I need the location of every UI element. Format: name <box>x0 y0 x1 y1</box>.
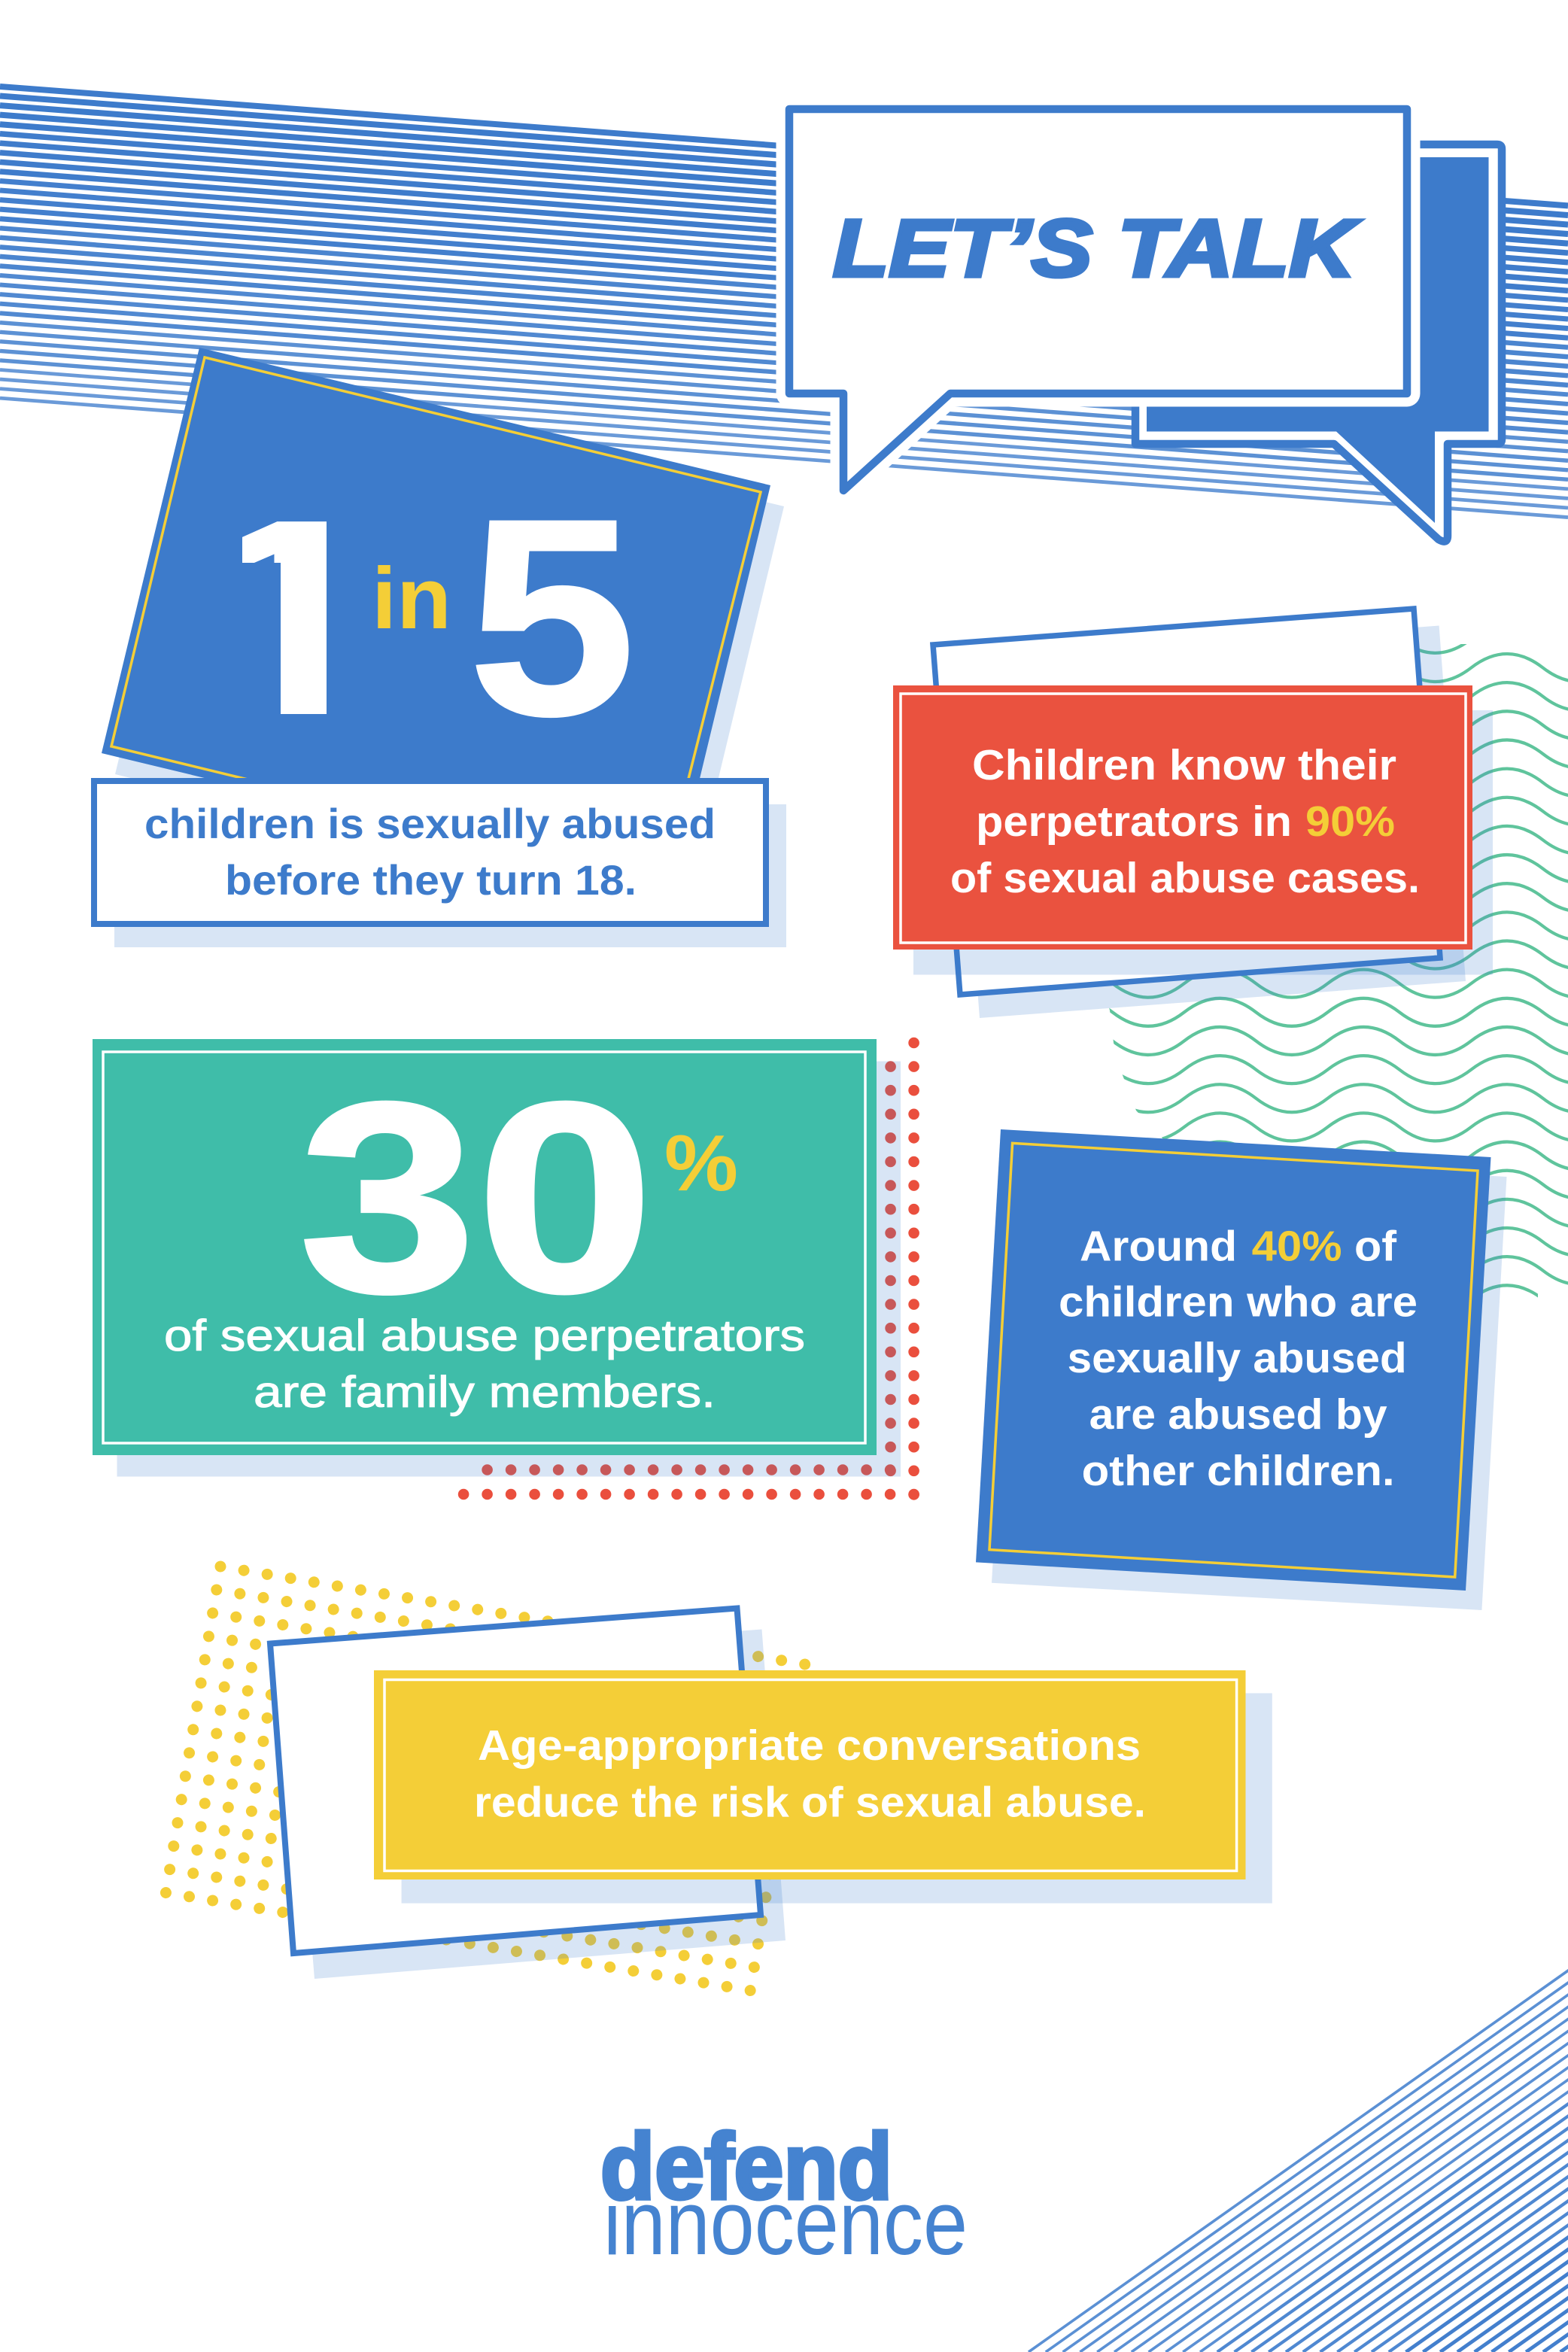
blue card text: other children. <box>1082 1447 1395 1495</box>
blue card text: are abused by <box>1089 1390 1387 1439</box>
blue card text: 40% <box>1252 1222 1342 1270</box>
blue card text: of <box>1354 1222 1397 1270</box>
blue card text: sexually abused <box>1068 1334 1407 1382</box>
logo: defend innocence <box>600 2115 968 2274</box>
green wave pattern <box>1109 644 1568 1297</box>
big number 5: 5 <box>468 460 636 773</box>
blue card text: children who are <box>1059 1278 1418 1326</box>
red card text: perpetrators in <box>976 798 1292 846</box>
label text <box>144 800 716 904</box>
panel: children know their perpetrators <box>893 609 1493 1018</box>
big number 1: 1 <box>180 460 405 773</box>
panel: around 40 percent <box>976 1129 1506 1610</box>
speech bubble: back blue <box>1135 144 1502 542</box>
logo: defend innocence: defend <box>600 2115 892 2219</box>
yellow card text <box>474 1721 1146 1827</box>
teal card text: of sexual abuse perpetrators <box>164 1311 805 1360</box>
speech bubble: front with title <box>789 109 1407 491</box>
word in: in <box>372 549 451 647</box>
label text: children is sexually abused <box>144 800 716 847</box>
blue card text <box>1059 1222 1418 1495</box>
yellow card text: reduce the risk of sexual abuse. <box>474 1779 1146 1827</box>
logo: defend innocence: innocence <box>603 2171 968 2274</box>
red card text: Children know their <box>972 741 1396 789</box>
yellow dot grid <box>166 1566 805 1991</box>
panel: 1 in 5 <box>94 348 786 947</box>
label text: before they turn 18. <box>225 856 637 904</box>
corner stripes bottom right <box>1029 1969 1568 2352</box>
percent sign: % <box>664 1119 738 1208</box>
label shadow <box>114 804 786 947</box>
red card text: 90% <box>1305 798 1395 846</box>
yellow card text: Age-appropriate conversations <box>478 1721 1141 1770</box>
teal card text <box>164 1311 805 1417</box>
panel: age-appropriate conversations <box>270 1609 1272 1979</box>
big number 30: 30 <box>299 1047 654 1349</box>
teal card text: are family members. <box>254 1368 716 1417</box>
background stripes: top band <box>0 87 1568 518</box>
red card text: of sexual abuse cases. <box>950 854 1420 902</box>
panel: 30 percent <box>93 1039 901 1476</box>
red dots <box>463 1043 914 1495</box>
title: LET’S TALK <box>833 202 1361 293</box>
red card text <box>950 741 1420 902</box>
label box <box>94 781 766 924</box>
blue card text: Around <box>1080 1222 1237 1270</box>
